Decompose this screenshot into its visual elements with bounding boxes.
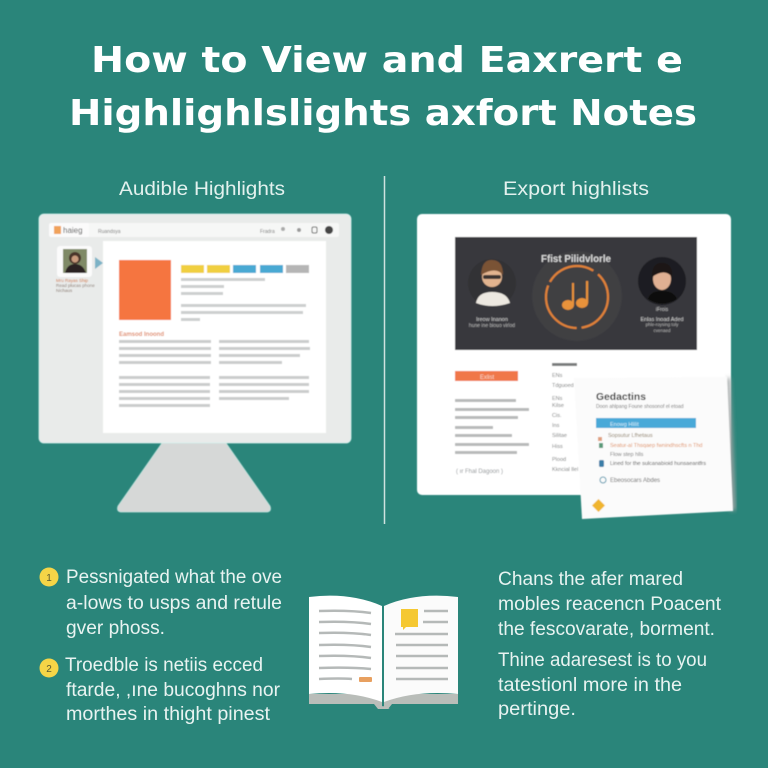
middle column labels: ENs — [552, 373, 563, 379]
middle column labels: Silitae — [552, 433, 567, 439]
left portrait — [468, 259, 516, 329]
title — [69, 40, 697, 134]
right portrait: Enlas Inoad Aded — [640, 317, 684, 323]
book text lines — [319, 611, 448, 679]
profile avatar: Nichaus — [56, 288, 73, 293]
dark banner — [455, 237, 697, 350]
card rows: Flow step hlls — [610, 452, 644, 458]
toolbar: haieg — [63, 226, 83, 235]
toolbar: Fradra — [260, 229, 275, 235]
orange cover — [119, 260, 171, 320]
card rows: Sopsutur Lfhetaus — [608, 433, 653, 439]
panel: desktop monitor — [39, 214, 351, 512]
white panel — [417, 214, 731, 495]
monitor screen frame — [39, 214, 351, 443]
yellow bookmark note — [401, 609, 418, 630]
list footer link: ( ır Fhal Dagoon ) — [456, 469, 503, 475]
panel: export window — [417, 214, 731, 495]
card heading: Gedactins — [596, 392, 646, 403]
step 2 text — [65, 655, 281, 725]
card rows: Lined for the sulcanabioid hunsaeantfrs — [610, 461, 706, 467]
right portrait: phle-roysing toly — [646, 322, 679, 327]
middle column labels: ENs — [552, 396, 563, 402]
step 2 text: ftarde, ,ıne bucoghns nor — [66, 680, 281, 701]
profile avatar: Mru Rayas Ship — [56, 278, 89, 283]
summary text lines — [181, 278, 306, 321]
yellow diamond badge — [592, 499, 605, 512]
section label: Eamsod Inoond — [119, 332, 164, 338]
middle column labels: Cis. — [552, 413, 562, 419]
step 1 text — [66, 567, 282, 639]
body text lines — [119, 340, 310, 407]
orange button — [455, 371, 518, 381]
middle column labels: Plood — [552, 457, 566, 463]
list text lines — [455, 399, 529, 454]
card shadow — [726, 378, 736, 511]
middle column labels: Hiss — [552, 444, 563, 450]
right portrait: iFrois — [656, 307, 669, 313]
right text block: Thine adaresest is to you — [498, 650, 707, 671]
profile avatar — [56, 246, 103, 293]
right text block: Chans the afer mared — [498, 569, 683, 590]
card rows — [598, 433, 706, 484]
step 2 text: morthes in thight pinest — [66, 704, 271, 725]
profile avatar: Read plucas phone — [56, 283, 95, 288]
step 1 text: gver phoss. — [66, 618, 165, 639]
card rows: Seatur-al Thsqaep fwnindhscfts n Thd — [610, 443, 702, 449]
middle column labels: Kilse — [552, 403, 564, 409]
right text block: the fescovarate, borment. — [498, 619, 715, 640]
heading: export highlights: Export highlists — [503, 179, 649, 200]
icon: open book — [309, 596, 458, 709]
middle column labels: Tdguoed — [552, 383, 574, 389]
step 1 badge: 1 — [46, 573, 52, 584]
panel: highlights popup card — [574, 377, 736, 519]
step 2 text: Troedble is netiis ecced — [65, 655, 263, 676]
dark banner: Ffist Pilidvlorle — [541, 254, 611, 265]
toolbar — [49, 223, 339, 237]
card rows: Ebeosocars Abdes — [610, 478, 660, 484]
middle column labels — [552, 363, 578, 473]
orange highlight mark — [359, 677, 372, 682]
blue selected row: Enowg Hlilit — [610, 422, 639, 428]
left portrait: hune ine biouo virlod — [469, 323, 515, 329]
step 1 text: Pessnigated what the ove — [66, 567, 282, 588]
card description: Doon ahlpang Foune shosonof el etoad — [596, 404, 684, 410]
left portrait: Ireow Inanon — [476, 317, 508, 323]
middle column labels: Kkncial Ilel — [552, 467, 578, 473]
right text block: pertinge. — [498, 699, 576, 720]
document page — [103, 241, 326, 433]
music note icon — [546, 266, 608, 328]
highlight tags — [181, 265, 309, 273]
step 1 text: a-lows to usps and retule — [66, 593, 282, 614]
step 2 badge — [40, 658, 58, 678]
toolbar: Ruandsya — [98, 229, 121, 235]
monitor stand — [118, 443, 270, 512]
heading: audible highlights: Audible Highlights — [119, 179, 285, 200]
middle column labels: Ins — [552, 423, 560, 429]
right text block — [498, 569, 722, 720]
right portrait — [638, 257, 686, 333]
right text block: tatestionl more in the — [498, 675, 682, 696]
title: Highlighlslights axfort Notes — [69, 93, 697, 134]
right text block: mobles reacencn Poacent — [498, 594, 722, 615]
step 2 badge: 2 — [46, 664, 52, 675]
orange button: Exlist — [480, 375, 494, 381]
title: How to View and Eaxrert e — [91, 40, 683, 81]
blue selected row — [596, 418, 696, 428]
step 1 badge — [40, 568, 58, 586]
card paper — [574, 377, 733, 519]
right portrait: cvenaed — [653, 328, 671, 333]
